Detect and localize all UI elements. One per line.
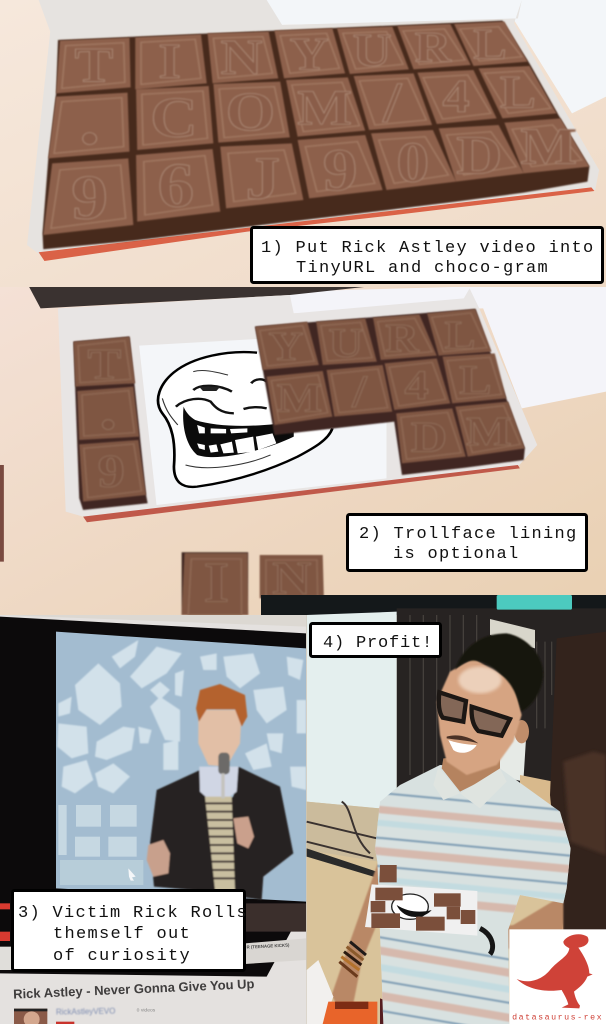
tile M: M (466, 408, 512, 454)
tile M (504, 118, 589, 175)
remaining chocolate tiles (73, 309, 525, 615)
mouse cursor (128, 868, 136, 881)
small trollface (392, 894, 432, 919)
white wall (307, 612, 397, 808)
video controls bar (245, 903, 306, 932)
callout 2: 2) Trollface lining (359, 525, 578, 544)
tile M (455, 402, 525, 457)
small chocolate tiles (371, 865, 475, 931)
tile slash (354, 72, 432, 135)
callout 2: is optional (393, 545, 520, 564)
microphone (218, 753, 230, 798)
man: smile (448, 740, 477, 753)
tile Y: Y (290, 28, 329, 79)
trollface eyes and creases (176, 379, 267, 413)
tile slash: / (351, 367, 368, 417)
description small text: R (TEENAGE KICKS) (246, 942, 290, 950)
tile slash (327, 365, 392, 417)
tile R (397, 23, 471, 71)
tile N (208, 29, 278, 84)
tile L (478, 66, 557, 118)
light strip above bezel (0, 610, 306, 627)
trollface teeth (197, 425, 276, 453)
shirt (199, 767, 238, 807)
callout 3: 3) Victim Rick Rolls (18, 904, 248, 923)
tile L: L (473, 20, 507, 68)
teal exit sign (497, 595, 572, 610)
tile T (73, 337, 135, 388)
chocolate tiles spelling the URL (43, 20, 589, 235)
hair (196, 684, 247, 727)
subscribe button (56, 1022, 74, 1024)
tile 9: 9 (98, 445, 125, 497)
face (198, 710, 242, 767)
callout 4: 4) Profit! (323, 634, 433, 653)
tile dot (77, 376, 139, 442)
tile 9: 9 (71, 162, 108, 232)
tile 9 (79, 440, 146, 502)
wall edge left (300, 615, 307, 1024)
tile L (427, 309, 492, 358)
man: neck (442, 755, 500, 792)
callout 4 (310, 624, 440, 656)
tile 0: 0 (396, 132, 429, 195)
tile 6: 6 (158, 150, 194, 220)
tile L: L (444, 313, 475, 358)
tile U (337, 24, 409, 75)
red box edge (83, 465, 520, 522)
panel 2: box opened with trollface lining (0, 285, 606, 615)
white card (307, 960, 333, 1024)
description strip behind callout (245, 938, 306, 964)
trollface mouth (183, 407, 294, 457)
tile I (135, 33, 207, 89)
tile O: O (226, 81, 275, 142)
callout 1: 1) Put Rick Astley video into (261, 239, 595, 258)
callout 3 (12, 890, 248, 970)
open box lid and tray (27, 0, 599, 257)
man: arms (332, 862, 563, 1005)
tile C (136, 86, 213, 150)
black bezel (0, 617, 306, 977)
striped tie (205, 797, 235, 890)
pale beam above head (490, 619, 535, 648)
table background (0, 285, 606, 615)
wall slats (410, 615, 552, 775)
tile 9 (43, 158, 133, 235)
left arm and hand (332, 862, 383, 1005)
channel thumbnail (14, 1009, 47, 1024)
forehead highlight (458, 667, 502, 693)
loose tile I: I (204, 552, 229, 615)
tile 0 (371, 130, 456, 195)
right forearm and hand (427, 895, 563, 955)
tile dot: . (79, 79, 100, 160)
trollface outline (158, 352, 332, 487)
man: ear (514, 720, 529, 743)
tile M (267, 371, 332, 425)
tile 6 (136, 149, 220, 222)
tile 9: 9 (323, 137, 358, 204)
red player marks (0, 903, 10, 941)
man: glasses (439, 692, 510, 736)
callout 1: TinyURL and choco-gram (296, 259, 549, 278)
callout 3: themself out (53, 925, 191, 944)
man: trousers (380, 998, 407, 1024)
shirt stripes (367, 792, 580, 1024)
channel name: RickAstleyVEVO (56, 1007, 115, 1017)
white lining sheet (139, 332, 387, 505)
tile U: U (353, 24, 392, 75)
object at left edge (0, 465, 4, 562)
man: collar (433, 767, 507, 808)
tile D (439, 124, 524, 185)
tile T: T (75, 37, 113, 92)
loose tile N (260, 552, 324, 603)
tile T: T (88, 340, 121, 388)
jacket (150, 767, 293, 900)
tile T (56, 37, 131, 93)
callout 3: of curiosity (53, 947, 191, 966)
tile J (220, 143, 303, 212)
tile M: M (521, 118, 577, 175)
tile L (454, 20, 528, 68)
small chocolate box with trollface (365, 865, 477, 936)
loose tile N: N (272, 552, 311, 603)
floor platform with bicycle rack (307, 802, 380, 862)
chocolate shadow blocks (73, 309, 525, 510)
panel 3: monitor showing the Rick Astley video (0, 610, 306, 1024)
red box edge (39, 187, 594, 261)
hands (147, 840, 170, 877)
tile I: I (158, 33, 181, 89)
tile R (373, 314, 437, 361)
tile 4 (385, 358, 450, 410)
callout 1 (252, 228, 602, 282)
small box tray (365, 884, 477, 936)
ceiling band (260, 595, 606, 615)
white paper behind box (263, 0, 606, 113)
Rick Astley figure (147, 684, 293, 900)
man: face (437, 658, 522, 775)
tile R: R (385, 317, 419, 361)
orange box (323, 1002, 377, 1024)
tile Y (255, 322, 319, 370)
man: hair (455, 633, 543, 712)
panel 4: man holding the chocolate box (260, 595, 606, 1024)
tile L: L (500, 66, 536, 117)
tile 4: 4 (405, 361, 429, 408)
video count: 0 videos (137, 1007, 156, 1013)
tile slash: / (382, 72, 402, 135)
floor beyond man (520, 775, 553, 808)
table background (0, 0, 606, 290)
dark strip at top (29, 287, 367, 308)
tile U: U (328, 320, 363, 366)
white card and orange box in hand (307, 960, 377, 1024)
tile L: L (459, 356, 492, 403)
tile O (213, 81, 290, 143)
tile 4: 4 (443, 70, 470, 122)
man: watch (480, 928, 493, 954)
red dinosaur (517, 934, 593, 1008)
large letter fragment (0, 947, 13, 970)
office floor background (260, 595, 606, 1024)
tile M: M (277, 375, 322, 421)
pale wall behind man (497, 728, 527, 782)
callout 2 (348, 514, 586, 570)
tile D: D (456, 124, 502, 185)
video frame (56, 632, 306, 902)
tile M: M (297, 80, 352, 135)
logo wordmark: datasaurus-rex (512, 1013, 603, 1023)
dark slatted wall and ceiling at right (397, 608, 606, 802)
loose tile I (182, 552, 248, 615)
trollface drawing (158, 352, 332, 487)
tile L (443, 353, 506, 403)
bicycle racks (307, 802, 377, 858)
panel 1: chocolate message in box (0, 0, 606, 290)
chocolate shadow block (43, 21, 589, 249)
tile 4 (417, 70, 497, 124)
video title: Rick Astley - Never Gonna Give You Up (13, 976, 255, 1002)
tile D: D (411, 414, 447, 462)
tile U (316, 318, 377, 366)
tile D (396, 408, 466, 463)
tile Y: Y (269, 323, 303, 369)
box lid and tray (58, 288, 537, 517)
tile M (286, 77, 365, 137)
lower window panes (58, 805, 143, 885)
man: moustache (447, 735, 478, 743)
page background below video (0, 610, 306, 1024)
tile dot (48, 92, 130, 159)
tile dot: . (100, 376, 117, 442)
man: patterned shirt (367, 762, 580, 1024)
white paper behind box (286, 287, 606, 408)
tile J: J (245, 146, 280, 212)
tile C: C (150, 87, 198, 150)
stained-glass window pattern (57, 640, 306, 793)
man: wristbands (339, 942, 366, 977)
tile Y (274, 28, 345, 79)
datasaurus-rex logo (509, 929, 606, 1024)
dark floor edge (307, 848, 377, 878)
tile R: R (415, 23, 452, 71)
tile 9 (298, 135, 383, 204)
tile N: N (221, 29, 262, 84)
wooden pillar (550, 632, 606, 932)
